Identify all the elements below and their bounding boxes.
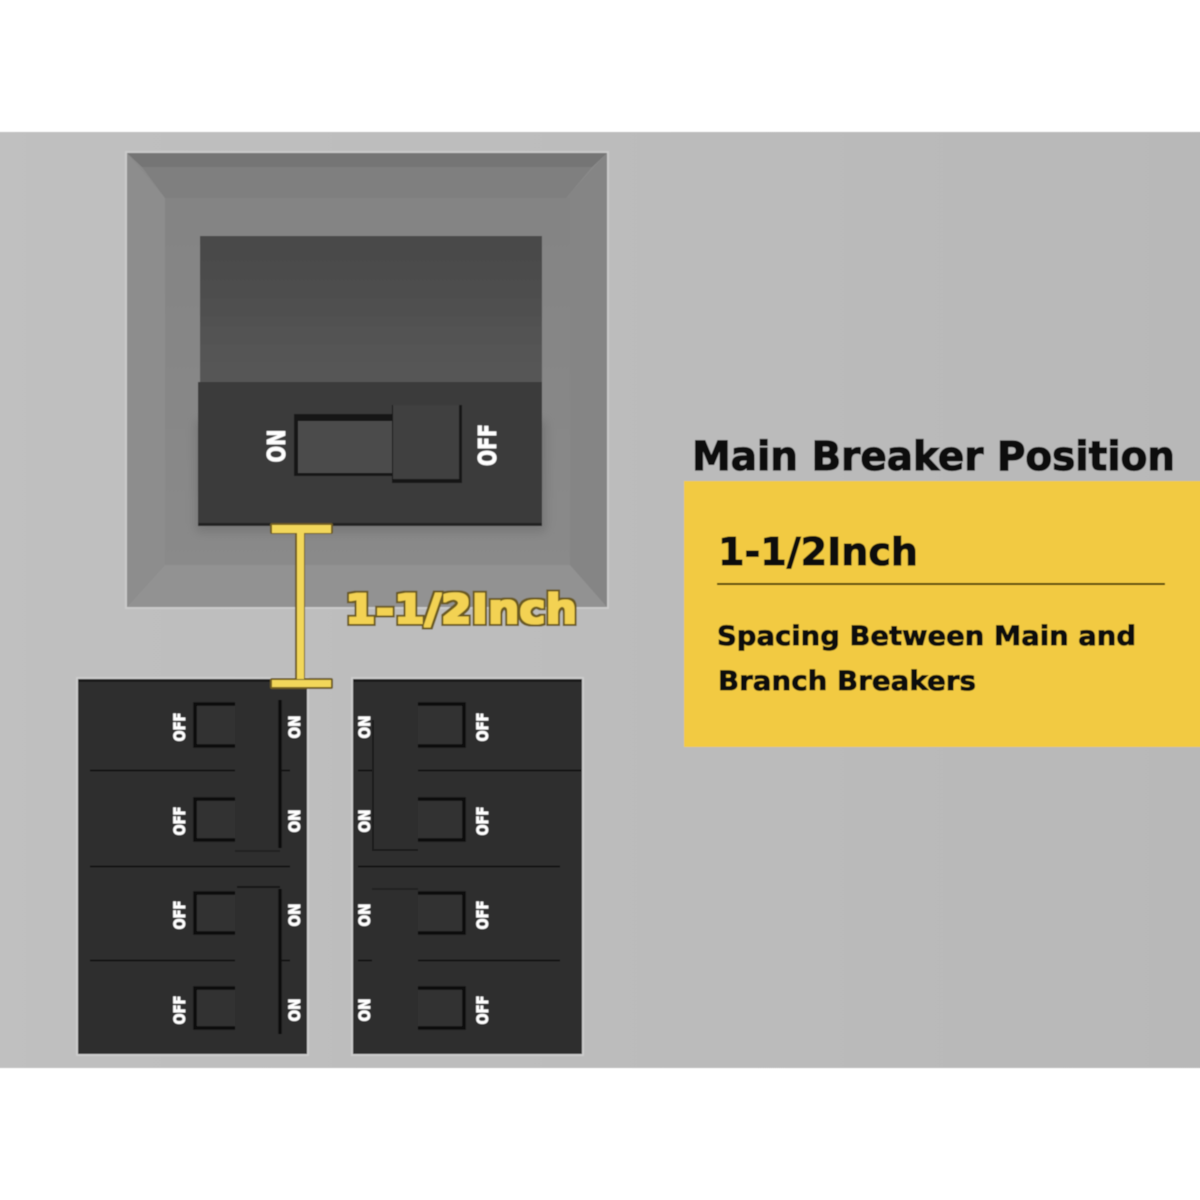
handle: lower left pair bbox=[235, 887, 281, 1054]
labels: left OFF and ON: OFF bbox=[170, 996, 189, 1024]
labels: left OFF and ON: OFF bbox=[170, 712, 189, 742]
windows bbox=[416, 704, 464, 1028]
label: ON: ON bbox=[262, 430, 291, 462]
labels: right ON and OFF: ON bbox=[355, 810, 374, 832]
main breaker window bbox=[294, 414, 394, 476]
labels: right ON and OFF bbox=[355, 712, 492, 1024]
heading: Main Breaker Position bbox=[692, 434, 1175, 480]
labels: right ON and OFF: ON bbox=[355, 998, 374, 1022]
labels: left OFF and ON: ON bbox=[285, 998, 304, 1022]
background panel bbox=[0, 132, 1200, 1068]
callout description: Spacing Between Main and bbox=[717, 621, 1136, 652]
handle: lower right pair bbox=[372, 889, 418, 1054]
main breaker handle bbox=[392, 405, 462, 483]
callout: yellow spacing card bbox=[684, 481, 1200, 747]
labels: right ON and OFF: OFF bbox=[473, 900, 492, 930]
labels: left OFF and ON: ON bbox=[285, 904, 304, 926]
panel: right branch breakers bbox=[351, 677, 584, 1056]
panel: main breaker recess bbox=[125, 151, 609, 609]
labels: left OFF and ON: ON bbox=[285, 810, 304, 832]
main breaker lower body bbox=[198, 382, 542, 526]
labels: right ON and OFF: OFF bbox=[473, 996, 492, 1024]
labels: right ON and OFF: ON bbox=[355, 904, 374, 926]
labels: right ON and OFF: ON bbox=[355, 716, 374, 738]
windows bbox=[195, 704, 237, 1028]
labels: left OFF and ON: OFF bbox=[170, 900, 189, 930]
handle: upper right pair bbox=[372, 697, 418, 851]
labels: left OFF and ON bbox=[170, 712, 304, 1024]
callout description bbox=[717, 621, 1136, 697]
labels: right ON and OFF: OFF bbox=[473, 806, 492, 836]
labels: left OFF and ON: ON bbox=[285, 716, 304, 738]
panel: left branch breakers bbox=[76, 677, 309, 1056]
label: OFF: OFF bbox=[473, 424, 502, 466]
dimension label: 1-1/2Inch bbox=[345, 587, 577, 633]
labels: right ON and OFF: OFF bbox=[473, 712, 492, 742]
main breaker shadow bbox=[196, 420, 546, 532]
labels: left OFF and ON: OFF bbox=[170, 806, 189, 836]
handle: upper left pair bbox=[235, 697, 281, 851]
dimension marker: spacing bracket bbox=[270, 523, 333, 689]
callout value: 1-1/2Inch bbox=[718, 530, 918, 574]
callout description: Branch Breakers bbox=[718, 666, 976, 697]
main breaker upper body bbox=[200, 236, 542, 384]
